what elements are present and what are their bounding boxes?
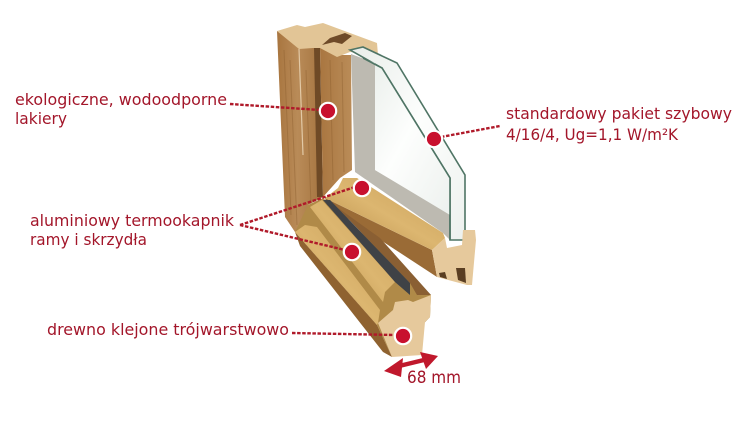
leader lines bbox=[230, 104, 500, 335]
lower rail: gold upper strip bbox=[310, 200, 395, 302]
upper rail: end notch right bbox=[456, 268, 466, 283]
glass: back pane bbox=[350, 47, 465, 240]
window cross-section illustration bbox=[277, 23, 476, 357]
lower rail: wood base bbox=[295, 232, 392, 357]
sash rebate: aluminium spacer bbox=[351, 54, 450, 240]
jamb: end grain top bbox=[277, 23, 378, 57]
label: glazing: 4/16/4, Ug=1,1 W/m²K bbox=[506, 125, 679, 144]
label: drip cap bbox=[30, 211, 235, 249]
upper rail: wood face bbox=[325, 198, 437, 277]
jamb: groove bbox=[314, 47, 323, 197]
marker dots bbox=[320, 103, 442, 344]
label: glazing bbox=[506, 104, 732, 144]
jamb: outer frame bbox=[277, 31, 323, 232]
lower rail: wood strip bbox=[327, 200, 431, 295]
label: glazing: standardowy pakiet szybowy bbox=[506, 104, 732, 123]
lower rail: end grain bbox=[378, 295, 431, 357]
dimension arrow bbox=[384, 352, 438, 377]
upper rail: end grain bbox=[432, 230, 476, 285]
upper rail: gold drip cap bbox=[325, 178, 445, 250]
label: lacquers bbox=[15, 90, 227, 128]
upper rail: end notches bbox=[439, 272, 447, 279]
lower rail: gasket bbox=[323, 200, 410, 295]
lower rail: base bbox=[295, 198, 431, 357]
jamb: joint notch bbox=[322, 33, 352, 45]
glass: front pane bbox=[363, 58, 450, 215]
glass unit bbox=[350, 47, 465, 240]
label: dimension: 68 mm bbox=[407, 368, 461, 387]
label: lacquers: ekologiczne, wodoodporne bbox=[15, 90, 227, 109]
label: lacquers: lakiery bbox=[15, 109, 67, 128]
lower rail: gold lower strip bbox=[295, 225, 380, 325]
label: laminated wood: drewno klejone trójwarstwowo bbox=[47, 320, 289, 339]
label: drip cap: aluminiowy termookapnik bbox=[30, 211, 235, 230]
jamb: wood grain bbox=[284, 49, 344, 225]
label: drip cap: ramy i skrzydła bbox=[30, 230, 147, 249]
jamb: sash bbox=[320, 47, 352, 197]
